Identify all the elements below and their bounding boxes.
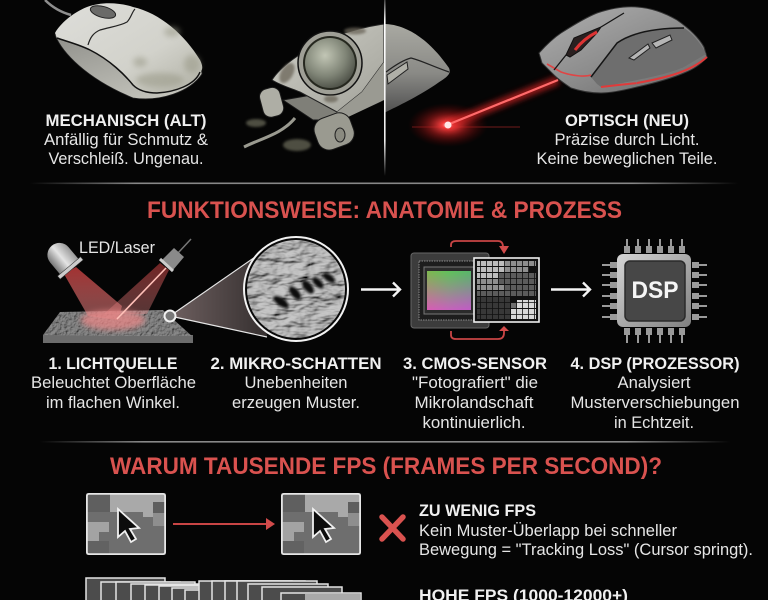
laser module bbox=[160, 239, 191, 271]
step 1 text bbox=[31, 354, 196, 412]
step 3 text: kontinuierlich. bbox=[422, 414, 526, 432]
illustration: split trackball mouse bbox=[244, 24, 450, 153]
text: Zu wenig FPS: Bewegung = "Tracking Loss" (Cursor springt). bbox=[419, 541, 753, 559]
label: Mechanisch: MECHANISCH (ALT) bbox=[46, 111, 206, 130]
arrow: step 3 to 4 bbox=[551, 282, 590, 296]
text: Zu wenig FPS: ZU WENIG FPS bbox=[419, 501, 536, 520]
heading: Funktionsweise: FUNKTIONSWEISE: ANATOMIE & PROZESS bbox=[147, 197, 622, 224]
step 2 text bbox=[210, 354, 382, 412]
step 4 text: 4. DSP (PROZESSOR) bbox=[570, 354, 740, 373]
frame B bbox=[281, 493, 361, 555]
heading: Warum tausende FPS: WARUM TAUSENDE FPS (FRAMES PER SECOND)? bbox=[110, 453, 662, 480]
step 4 text: Musterverschiebungen bbox=[570, 394, 740, 412]
illustration: optical mouse with laser bbox=[408, 7, 707, 147]
label: Mechanisch bbox=[44, 111, 208, 168]
text: Zu wenig FPS bbox=[419, 501, 753, 559]
low fps frames and arrow bbox=[86, 493, 361, 555]
step 3 text: Mikrolandschaft bbox=[414, 394, 534, 412]
step 1 text: 1. LICHTQUELLE bbox=[48, 354, 178, 373]
step 4 text bbox=[570, 354, 740, 432]
LED bulb bbox=[40, 236, 83, 279]
label: Mechanisch: Anfällig für Schmutz & bbox=[44, 131, 208, 149]
left half bbox=[258, 24, 384, 153]
arrow bbox=[173, 518, 275, 530]
step 4 text: in Echtzeit. bbox=[614, 414, 694, 432]
step 3 text: 3. CMOS-SENSOR bbox=[403, 354, 547, 373]
icon: red cross bbox=[382, 517, 403, 539]
label: Optisch: Präzise durch Licht. bbox=[554, 131, 700, 149]
arrow: step 2 to 3 bbox=[361, 282, 400, 296]
label: Optisch: Keine beweglichen Teile. bbox=[536, 150, 718, 168]
illustration: DSP chip: DSP bbox=[632, 277, 678, 304]
step 1 text: im flachen Winkel. bbox=[46, 394, 180, 412]
illustration: DSP chip bbox=[602, 239, 707, 343]
text: Zu wenig FPS: Kein Muster-Überlapp bei schneller bbox=[419, 522, 677, 540]
step 2 text: 2. MIKRO-SCHATTEN bbox=[210, 354, 382, 373]
illustration: light source on surface bbox=[40, 236, 193, 343]
step 3 text bbox=[403, 354, 547, 432]
high fps frame stack bbox=[86, 578, 361, 600]
red loop arrows bbox=[451, 241, 504, 339]
laser beam bbox=[104, 263, 169, 314]
surface bbox=[43, 310, 193, 343]
LED beam bbox=[64, 267, 122, 320]
step 2 text: Unebenheiten bbox=[244, 374, 348, 392]
label: Optisch bbox=[536, 111, 718, 168]
pixel grid bbox=[474, 258, 539, 322]
label: Optisch: OPTISCH (NEU) bbox=[565, 111, 689, 130]
illustration: CMOS sensor bbox=[411, 241, 539, 339]
illustration: mechanical ball mouse bbox=[45, 0, 202, 99]
vertical split line bbox=[384, 0, 386, 176]
step 2 text: erzeugen Muster. bbox=[232, 394, 360, 412]
label: LED/Laser: LED/Laser bbox=[79, 239, 155, 257]
frame A bbox=[86, 493, 166, 555]
step 1 text: Beleuchtet Oberfläche bbox=[31, 374, 196, 392]
label: Mechanisch: Verschleiß. Ungenau. bbox=[48, 150, 204, 168]
step 3 text: "Fotografiert" die bbox=[412, 374, 538, 392]
illustration: magnified micro shadows bbox=[164, 237, 348, 341]
step 4 text: Analysiert bbox=[618, 374, 691, 392]
right half bbox=[384, 24, 450, 113]
